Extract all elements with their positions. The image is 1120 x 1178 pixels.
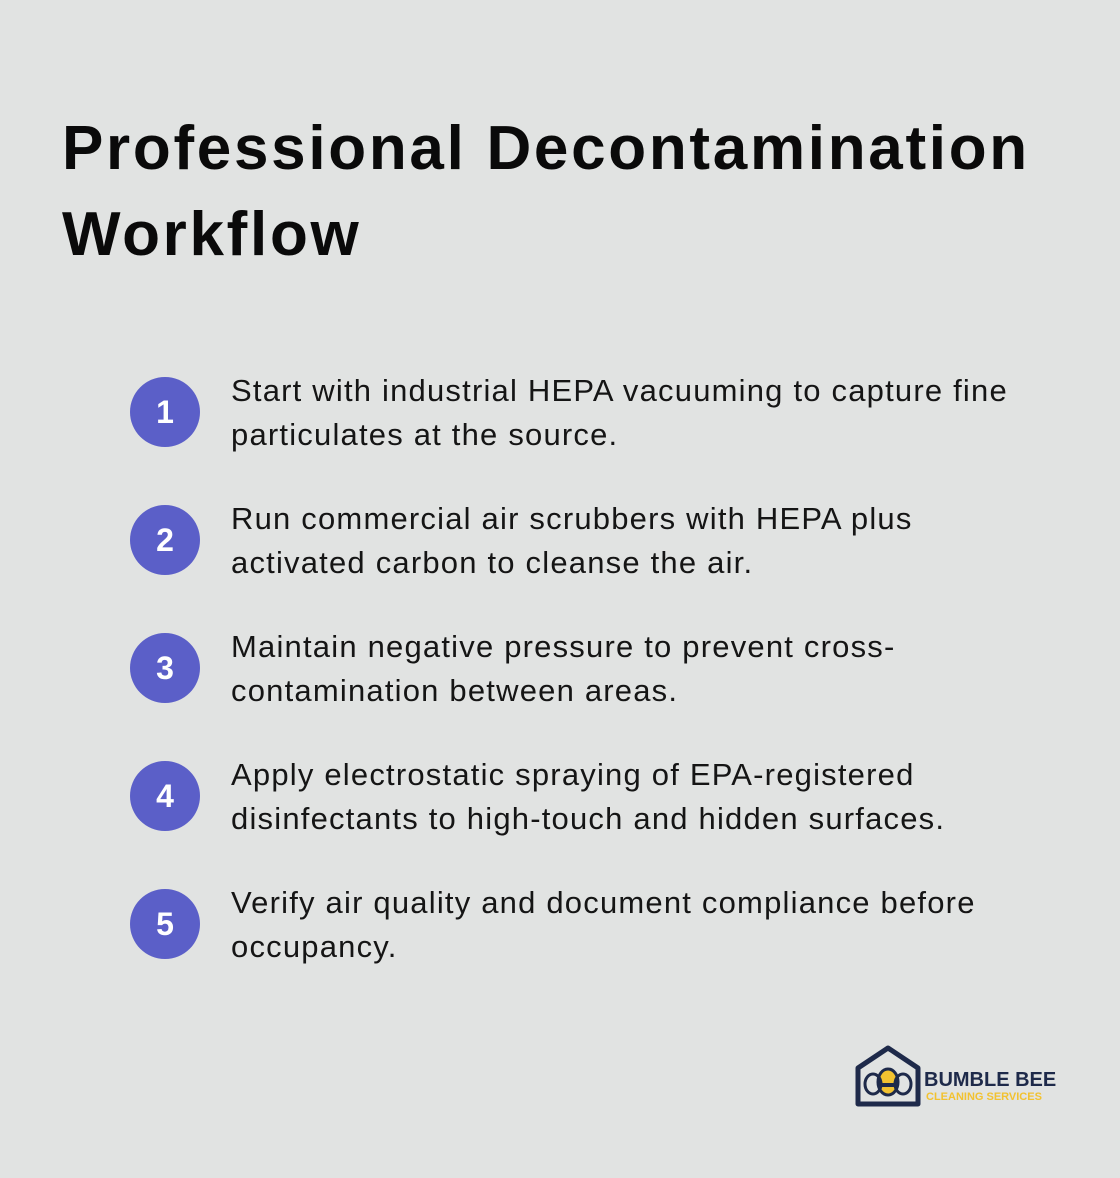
step 4: Apply electrostatic spraying of EPA-registered (231, 757, 915, 792)
step 3: Maintain negative pressure to prevent cross- (231, 629, 896, 664)
title: Workflow (62, 200, 361, 269)
step 4 (130, 757, 945, 836)
step 5: 5 (156, 906, 174, 942)
step 5 (130, 885, 976, 964)
step 3 (130, 629, 896, 708)
step 1: 1 (156, 394, 174, 430)
step 2: Run commercial air scrubbers with HEPA plus (231, 501, 913, 536)
step 2 (130, 501, 913, 580)
step 4: disinfectants to high-touch and hidden surfaces. (231, 801, 945, 836)
step 3: contamination between areas. (231, 673, 678, 708)
step 3: 3 (156, 650, 174, 686)
step 5: occupancy. (231, 929, 398, 964)
title: Professional Decontamination (62, 114, 1030, 183)
step 2: 2 (156, 522, 174, 558)
icon: bee house (856, 1046, 920, 1106)
logo: CLEANING SERVICES (926, 1091, 1042, 1103)
title (62, 114, 1030, 269)
step 4: 4 (156, 778, 174, 814)
logo text: BUMBLE BEE (924, 1069, 1056, 1091)
step 1 (130, 373, 1008, 452)
step 5: Verify air quality and document compliance before (231, 885, 976, 920)
step 1: Start with industrial HEPA vacuuming to capture fine (231, 373, 1008, 408)
step 2: activated carbon to cleanse the air. (231, 545, 753, 580)
step 1: particulates at the source. (231, 417, 618, 452)
logo (856, 1046, 1056, 1106)
